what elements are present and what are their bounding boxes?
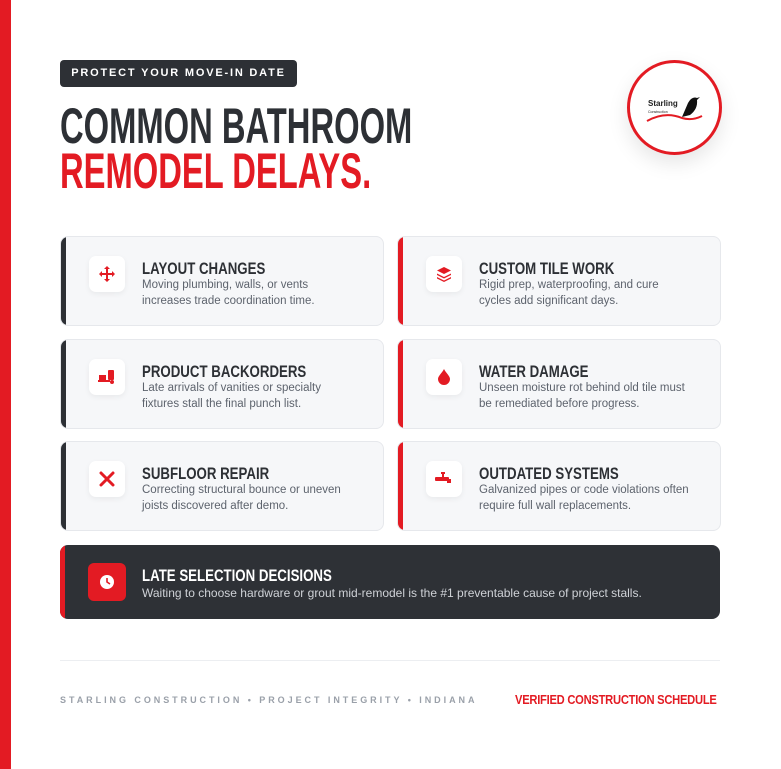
card: subfloor repair: [60, 441, 384, 531]
card: subfloor repair: joists discovered after demo.: [142, 500, 288, 512]
card: custom tile work: [397, 236, 721, 326]
card: layout changes: [60, 236, 384, 326]
card: product backorders: Late arrivals of vanities or specialty: [142, 382, 321, 394]
callout: late selection decisions: Waiting to choose hardware or grout mid-remodel is the #1 preventable cause of project stalls.: [142, 586, 642, 600]
card: custom tile work: Rigid prep, waterproofing, and cure: [479, 279, 659, 291]
card: custom tile work: cycles add significant days.: [479, 294, 618, 306]
divider: [60, 660, 720, 661]
card: product backorders: [60, 339, 384, 429]
card: product backorders: fixtures stall the final punch list.: [142, 398, 301, 410]
card: water damage: Unseen moisture rot behind old tile must: [479, 382, 685, 394]
card: product backorders: PRODUCT BACKORDERS: [142, 362, 306, 381]
title: [60, 98, 412, 199]
callout: late selection decisions: LATE SELECTION DECISIONS: [142, 566, 332, 585]
card: custom tile work: CUSTOM TILE WORK: [479, 259, 614, 278]
logo circle: Starling: [648, 99, 678, 108]
footer right: VERIFIED CONSTRUCTION SCHEDULE: [515, 692, 717, 707]
badge: protect your move-in date: [60, 60, 297, 87]
card: layout changes: Moving plumbing, walls, or vents: [142, 279, 308, 291]
card: water damage: WATER DAMAGE: [479, 362, 589, 381]
icon: water drop: [426, 359, 462, 395]
card: subfloor repair: SUBFLOOR REPAIR: [142, 464, 269, 483]
card: outdated systems: require full wall replacements.: [479, 500, 631, 512]
icon: tools: [89, 461, 125, 497]
card: water damage: be remediated before progress.: [479, 398, 639, 410]
badge: protect your move-in date: PROTECT YOUR MOVE-IN DATE: [71, 67, 286, 79]
card: subfloor repair: Correcting structural bounce or uneven: [142, 484, 341, 496]
card: water damage: [397, 339, 721, 429]
card: outdated systems: OUTDATED SYSTEMS: [479, 464, 619, 483]
card: outdated systems: [397, 441, 721, 531]
logo circle: [627, 60, 722, 155]
icon: layers: [426, 256, 462, 292]
title: COMMON BATHROOM: [60, 98, 412, 154]
footer left: STARLING CONSTRUCTION • PROJECT INTEGRITY • INDIANA: [60, 695, 477, 705]
card: layout changes: LAYOUT CHANGES: [142, 259, 265, 278]
red left accent bar: [0, 0, 11, 769]
icon: faucet: [426, 461, 462, 497]
title: REMODEL DELAYS.: [60, 143, 371, 199]
card: outdated systems: Galvanized pipes or code violations often: [479, 484, 689, 496]
icon: arrows: [89, 256, 125, 292]
card: layout changes: increases trade coordination time.: [142, 294, 315, 306]
icon: clock: [88, 563, 126, 601]
icon: truck: [89, 359, 125, 395]
callout: late selection decisions: [60, 545, 720, 619]
logo circle: Construction: [648, 110, 668, 114]
